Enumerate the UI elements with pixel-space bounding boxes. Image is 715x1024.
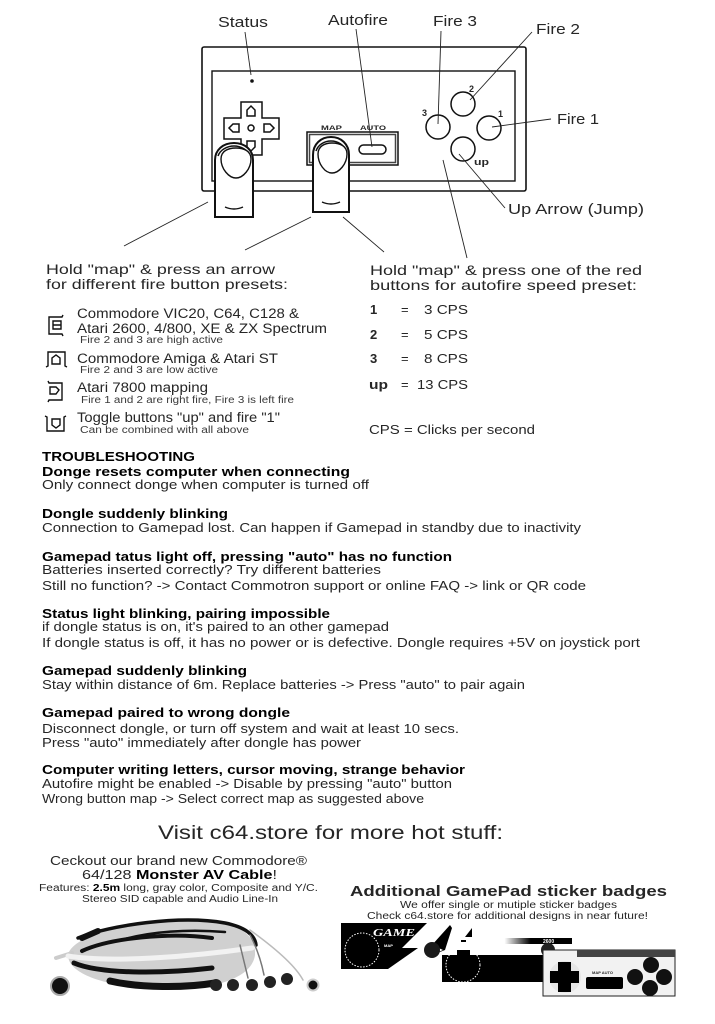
map and auto switch panel: MAP	[321, 126, 342, 132]
item: strange behavior	[42, 762, 465, 806]
sticker: black gamepad badge: MAP	[384, 943, 393, 948]
item: pairing impossible: Status light blinking, pairing impossible	[42, 606, 330, 621]
callout leader lines	[124, 29, 551, 258]
panel: autofire speed presets	[369, 262, 642, 437]
fire buttons: 1	[498, 109, 503, 119]
item: gamepad blinking: Stay within distance of 6m. Replace batteries -> Press "auto" to pair again	[42, 677, 525, 692]
preset: Amiga and Atari ST: Commodore Amiga & Atari ST	[77, 351, 278, 366]
icon: right finger	[313, 137, 349, 212]
sticker: black gamepad badge: GAME	[373, 927, 415, 939]
item: gamepad blinking	[42, 663, 525, 692]
map and auto switch panel: AUTO	[360, 126, 387, 132]
speed table: 3	[370, 351, 377, 366]
callout labels: Up Arrow (Jump)	[508, 201, 644, 218]
heading: autofire: Hold "map" & press one of the red	[370, 262, 642, 278]
item: gamepad blinking: Gamepad suddenly blinking	[42, 663, 247, 678]
illustration: coiled cable	[51, 920, 318, 995]
preset: Amiga and Atari ST	[77, 351, 278, 376]
badges heading: Additional GamePad sticker badges	[350, 883, 667, 900]
preset: Commodore and Atari 2600: Commodore VIC20, C64, C128 &	[77, 306, 299, 321]
item: dongle resets: Donge resets computer when connecting	[42, 464, 350, 479]
sticker: light gamepad badge	[543, 950, 675, 996]
sticker: 2600 style badge	[442, 938, 572, 982]
item: wrong dongle: Press "auto" immediately after dongle has power	[42, 735, 362, 750]
item: wrong dongle: Disconnect dongle, or turn off system and wait at least 10 secs.	[42, 721, 459, 736]
item: dongle blinking: Dongle suddenly blinking	[42, 506, 228, 521]
preset: Atari 7800	[77, 380, 295, 406]
item: dongle blinking	[42, 506, 582, 535]
speed table: up	[369, 377, 388, 392]
heading: troubleshooting: TROUBLESHOOTING	[42, 449, 195, 464]
preset: Commodore and Atari 2600: Fire 2 and 3 are high active	[80, 335, 224, 346]
item: status light off: Still no function? -> Contact Commotron support or online FAQ -> link or QR code	[42, 578, 586, 593]
icon: preset down	[45, 416, 66, 431]
icon: preset up	[46, 352, 67, 367]
callout labels: Autofire	[328, 12, 388, 29]
preset: Commodore and Atari 2600: Atari 2600, 4/800, XE & ZX Spectrum	[77, 321, 327, 336]
gamepad outer body	[202, 47, 526, 191]
panel: troubleshooting	[42, 449, 640, 806]
item: strange behavior: Autofire might be enabled -> Disable by pressing "auto" button	[42, 776, 452, 791]
speed table: 8 CPS	[424, 351, 468, 366]
heading: autofire: buttons for autofire speed preset:	[370, 277, 637, 293]
item: wrong dongle	[42, 705, 459, 750]
icon: directional pad	[224, 102, 279, 155]
sticker: light gamepad badge: MAP AUTO	[592, 970, 613, 975]
preset: Amiga and Atari ST: Fire 2 and 3 are low active	[80, 365, 219, 376]
map and auto switch panel	[307, 126, 398, 165]
badges description: Check c64.store for additional designs in near future!	[367, 911, 648, 922]
item: pairing impossible: If dongle status is off, it has no power or is defective. Dongle requires +5V on joystick port	[42, 635, 640, 650]
sticker: black gamepad badge	[341, 923, 472, 969]
speed table: 13 CPS	[417, 377, 468, 392]
cable description: Ceckout our brand new Commodore®	[50, 854, 308, 868]
preset: toggle buttons: Can be combined with all above	[80, 425, 250, 436]
callout labels: Fire 1	[557, 111, 599, 128]
item: wrong dongle: Gamepad paired to wrong dongle	[42, 705, 290, 720]
CPS note: CPS = Clicks per second	[369, 422, 535, 437]
badges description: We offer single or mutiple sticker badges	[400, 900, 617, 911]
preset: Commodore and Atari 2600	[77, 306, 327, 346]
item: strange behavior: Wrong button map -> Select correct map as suggested above	[42, 791, 424, 806]
panel: fire button presets	[45, 261, 327, 436]
heading: presets	[46, 261, 288, 292]
cable description: Features: 2.5m long, gray color, Composite and Y/C.	[39, 883, 318, 894]
cable description	[39, 854, 318, 905]
preset: Atari 7800: Atari 7800 mapping	[77, 380, 208, 395]
gamepad inner panel	[212, 71, 515, 181]
item: strange behavior: Computer writing letters, cursor moving, strange behavior	[42, 762, 465, 777]
icon: left finger	[215, 143, 253, 217]
callout labels: Status	[218, 14, 268, 31]
item: dongle resets	[42, 464, 369, 492]
callout labels	[218, 12, 644, 218]
cable description: Stereo SID capable and Audio Line-In	[82, 894, 278, 905]
fire buttons: up	[474, 157, 490, 167]
speed table: =	[401, 377, 409, 392]
heading: presets: Hold "map" & press an arrow	[46, 261, 276, 277]
speed table: =	[401, 302, 409, 317]
icon: preset right	[48, 381, 62, 402]
panel: sticker badges	[341, 883, 675, 996]
panel: monster AV cable	[39, 854, 318, 995]
heading: autofire	[370, 262, 642, 293]
preset: toggle buttons	[77, 410, 280, 436]
diagram: gamepad with callouts	[124, 12, 644, 258]
speed table: 5 CPS	[424, 327, 468, 342]
fire buttons: 2	[469, 84, 474, 94]
callout labels: Fire 2	[536, 21, 580, 38]
item: status light off: Batteries inserted correctly? Try different batteries	[42, 562, 382, 577]
item: status light off: Gamepad tatus light off, pressing "auto" has no function	[42, 549, 452, 564]
promo heading: Visit c64.store for more hot stuff:	[158, 823, 503, 844]
speed table	[369, 302, 468, 392]
item: status light off	[42, 549, 586, 593]
status light	[250, 79, 254, 83]
item: pairing impossible: if dongle status is on, it's paired to an other gamepad	[42, 619, 389, 634]
callout labels: Fire 3	[433, 13, 477, 30]
fire buttons: 3	[422, 108, 427, 118]
speed table: 3 CPS	[424, 302, 468, 317]
icon: preset left	[49, 315, 63, 336]
heading: presets: for different fire button presets:	[46, 276, 288, 292]
item: dongle blinking: Connection to Gamepad lost. Can happen if Gamepad in standby due to inactivity	[42, 520, 582, 535]
fire buttons	[422, 84, 503, 167]
cable description: 64/128 Monster AV Cable !	[82, 868, 277, 882]
item: dongle resets: Only connect donge when computer is turned off	[42, 477, 369, 492]
item: pairing impossible	[42, 606, 640, 650]
badges description	[367, 900, 648, 922]
sticker: 2600 style badge: 2600	[543, 939, 554, 945]
speed table: 2	[370, 327, 377, 342]
preset: Atari 7800: Fire 1 and 2 are right fire, Fire 3 is left fire	[81, 395, 295, 406]
preset: toggle buttons: Toggle buttons "up" and fire "1"	[77, 410, 280, 425]
speed table: =	[401, 327, 409, 342]
speed table: =	[401, 351, 409, 366]
speed table: 1	[370, 302, 377, 317]
